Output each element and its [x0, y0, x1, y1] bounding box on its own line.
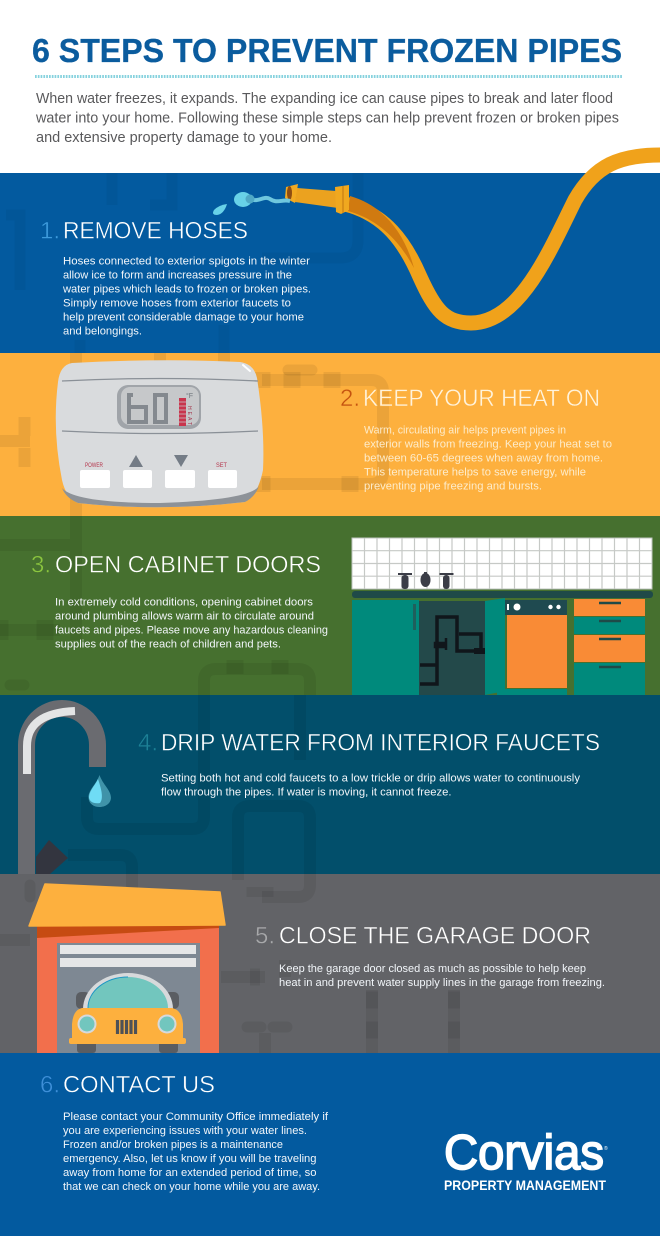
illustration: kitchen with open cabinet	[352, 538, 653, 695]
garage door	[57, 943, 200, 1053]
water drop	[88, 775, 111, 807]
heading: close the garage door: CLOSE THE GARAGE DOOR	[279, 922, 591, 949]
thermostat buttons	[80, 455, 237, 488]
intro text: water into your home. Following these simple steps can help prevent frozen or broken pipes	[35, 110, 619, 126]
heading: contact us: CONTACT US	[63, 1071, 215, 1098]
text block: contact us	[63, 1111, 329, 1193]
step 5: close the garage door	[29, 884, 605, 1053]
text block: keep your heat on: between 60-65 degrees when away from home.	[364, 452, 603, 464]
heading: close the garage door: 5.	[255, 922, 275, 949]
text block: open cabinet doors	[55, 596, 328, 650]
text block: close the garage door: heat in and prevent water supply lines in the garage from freezing.	[279, 977, 605, 989]
tile backsplash	[352, 538, 652, 589]
panel: garage door background	[0, 874, 660, 1053]
intro text	[35, 90, 619, 146]
text block: contact us: Frozen and/or broken pipes is a maintenance	[63, 1139, 283, 1151]
panel: remove hoses background	[0, 173, 660, 353]
heading: drip water: DRIP WATER FROM INTERIOR FAUCETS	[161, 730, 600, 757]
thermostat screen: °F	[186, 392, 193, 400]
text block: keep your heat on	[364, 424, 612, 492]
text block: contact us: away from home for an extended period of time, so	[63, 1167, 316, 1179]
text block: open cabinet doors: supplies out of the reach of children and pets.	[55, 638, 281, 650]
thermostat screen: HEAT	[186, 406, 192, 425]
logo: Corvias Property Management: ®	[604, 1145, 608, 1152]
intro text: When water freezes, it expands. The expanding ice can cause pipes to break and later flood	[36, 90, 613, 107]
thermostat screen	[117, 385, 201, 429]
heading: keep your heat on: KEEP YOUR HEAT ON	[363, 385, 600, 412]
text block: remove hoses: help prevent considerable damage to your home	[63, 312, 304, 324]
panel: drip water background	[0, 695, 660, 874]
heading: drip water: 4.	[138, 730, 158, 757]
icon: thermostat	[56, 360, 263, 507]
text block: close the garage door	[279, 963, 605, 989]
heading: open cabinet doors: 3.	[31, 552, 51, 579]
panel: keep heat on background	[0, 353, 660, 516]
text block: contact us: Please contact your Community Office immediately if	[63, 1111, 329, 1123]
step 3: open cabinet doors	[31, 538, 653, 695]
step 6: contact us	[40, 1071, 608, 1193]
header panel	[0, 0, 660, 173]
text block: remove hoses: water pipes which leads to frozen or broken pipes.	[62, 284, 311, 296]
drawers	[574, 599, 645, 695]
text block: drip water: flow through the pipes. If water is moving, it cannot freeze.	[161, 786, 452, 798]
background pipes pattern	[0, 173, 460, 1053]
heading: contact us: 6.	[40, 1071, 60, 1098]
illustration: garage with car	[29, 884, 225, 1053]
text block: remove hoses: Hoses connected to exterior spigots in the winter	[63, 256, 310, 268]
text block: keep your heat on: exterior walls from freezing. Keep your heat set to	[364, 438, 612, 450]
step 2: keep your heat on	[56, 360, 612, 507]
heading: remove hoses: REMOVE HOSES	[63, 218, 248, 244]
thermostat buttons: POWER	[85, 463, 104, 469]
left cabinet door	[352, 600, 419, 695]
text block: drip water: Setting both hot and cold faucets to a low trickle or drip allows water to continuously	[161, 772, 580, 784]
heading: open cabinet doors: OPEN CABINET DOORS	[55, 552, 321, 579]
text block: contact us: emergency. Also, let us know if you will be traveling	[63, 1153, 316, 1165]
panel: contact us background	[0, 1053, 660, 1236]
text block: open cabinet doors: In extremely cold conditions, opening cabinet doors	[55, 596, 314, 608]
text block: open cabinet doors: faucets and pipes. Please move any hazardous cleaning	[55, 624, 328, 636]
panel: open cabinet doors background	[0, 516, 660, 695]
car	[69, 973, 186, 1053]
text block: remove hoses: Simply remove hoses from exterior faucets to	[63, 298, 291, 310]
text block: keep your heat on: Warm, circulating air helps prevent pipes in	[364, 424, 566, 436]
title: 6 STEPS TO PREVENT FROZEN PIPES	[32, 32, 622, 69]
text block: open cabinet doors: around plumbing allows warm air to circulate around	[55, 610, 314, 622]
text block: close the garage door: Keep the garage door closed as much as possible to help keep	[279, 963, 586, 975]
text block: remove hoses: and belongings.	[63, 326, 142, 338]
intro text: and extensive property damage to your home.	[36, 129, 332, 146]
open cabinet with pipes	[419, 598, 505, 695]
heading: remove hoses: 1.	[40, 218, 60, 244]
logo: Corvias Property Management: PROPERTY MANAGEMENT	[444, 1178, 607, 1193]
text block: remove hoses	[62, 256, 311, 338]
step 4: drip water	[26, 708, 600, 874]
icon: garden hose with water	[213, 155, 660, 323]
heading: keep your heat on: 2.	[340, 385, 360, 412]
faucet handles	[398, 572, 454, 589]
text block: keep your heat on: This temperature helps to save energy, while	[364, 466, 586, 478]
logo: Corvias Property Management: Corvias	[444, 1126, 604, 1180]
thermostat buttons: SET	[216, 463, 227, 469]
stove	[497, 600, 567, 695]
text block: remove hoses: allow ice to form and increases pressure in the	[63, 270, 292, 282]
text block: contact us: you are experiencing issues with your water lines.	[63, 1125, 307, 1137]
text block: keep your heat on: preventing pipe freezing and bursts.	[364, 480, 542, 492]
text block: contact us: that we can check on your home while you are away.	[63, 1181, 320, 1193]
text block: drip water	[161, 772, 580, 798]
step 1: remove hoses	[40, 155, 660, 338]
icon: faucet	[26, 708, 111, 874]
